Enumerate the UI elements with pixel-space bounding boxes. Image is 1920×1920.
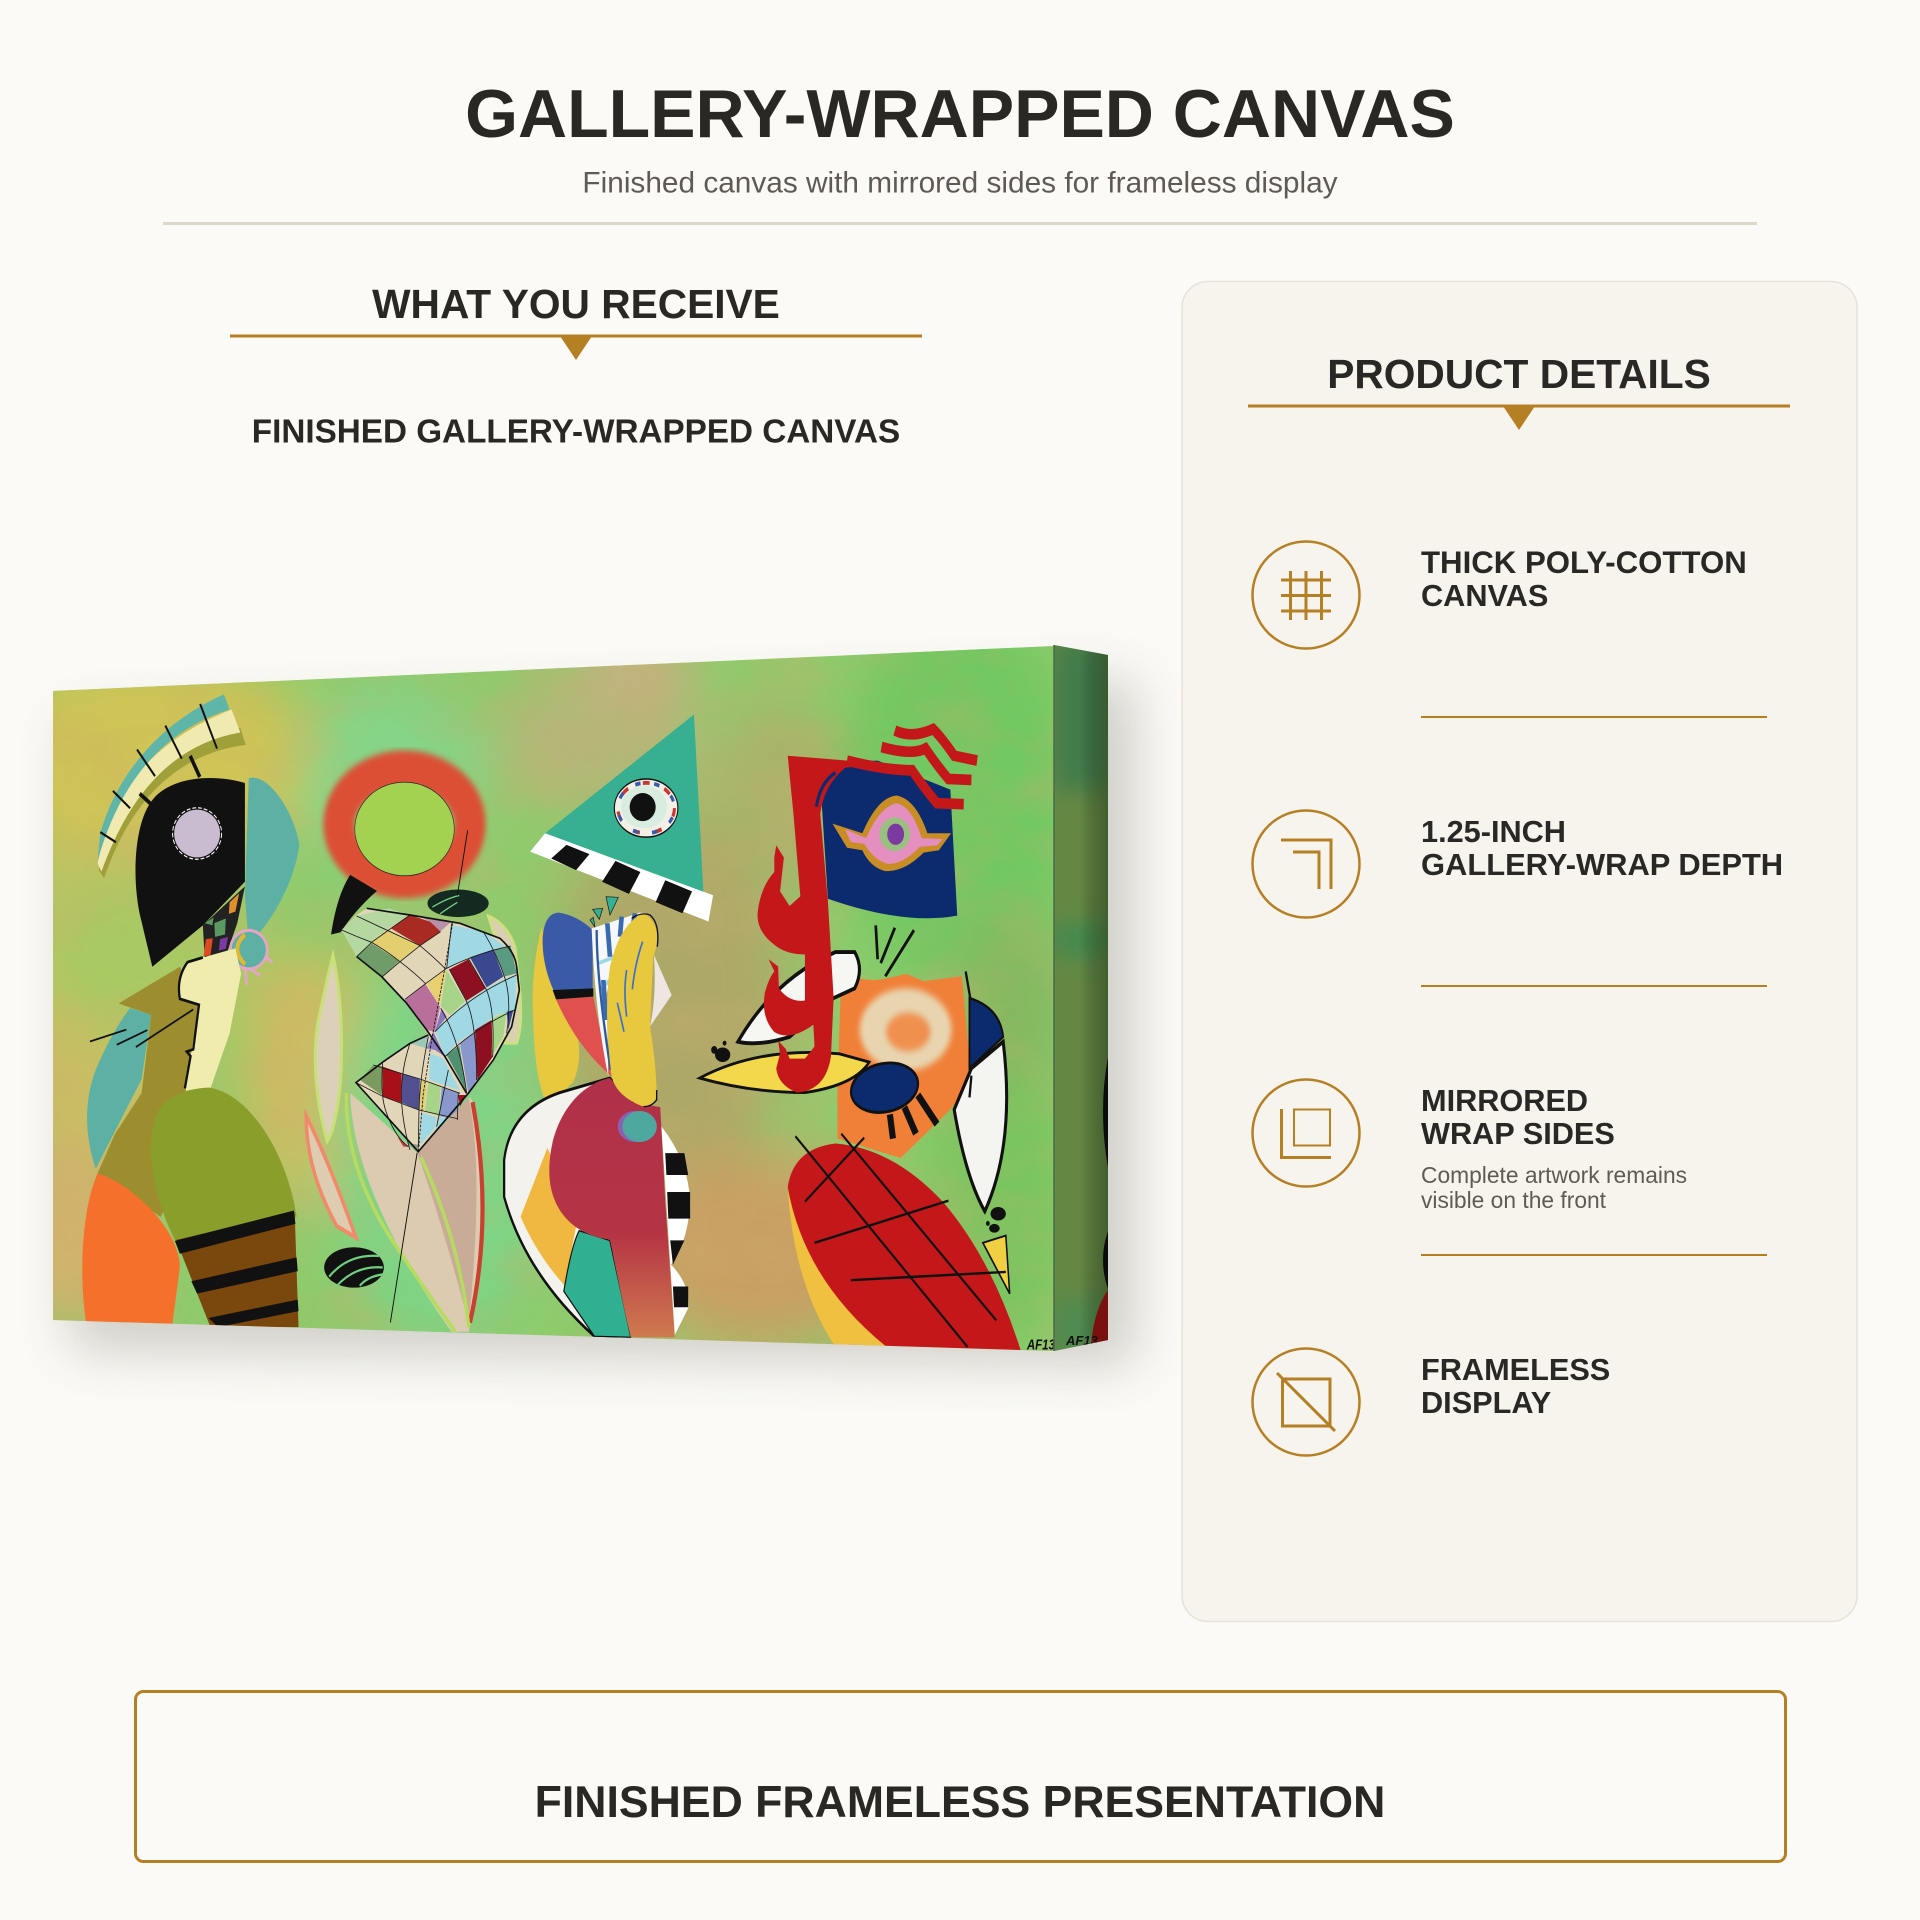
pale leaf — [315, 955, 342, 1141]
pale triangle — [650, 955, 672, 1027]
painting front — [53, 646, 1054, 1351]
green torso — [151, 1087, 297, 1242]
section heading: what you receive — [230, 281, 922, 360]
text: MIRRORED — [1421, 1083, 1588, 1118]
olive collar body — [98, 966, 198, 1217]
net form — [342, 908, 521, 1152]
red wedge — [556, 997, 612, 1077]
net outline — [356, 908, 519, 1152]
navy hatch — [816, 773, 845, 807]
teal wedge — [564, 1231, 631, 1337]
row: wrap depth — [1252, 810, 1783, 987]
figure 3: upper back forms — [533, 913, 647, 1103]
text: THICK POLY-COTTON — [1421, 545, 1747, 580]
crest — [98, 694, 246, 878]
icon: depth corner — [1252, 810, 1360, 918]
crimson form — [549, 1078, 675, 1337]
subtitle: Finished canvas with mirrored sides for frameless display — [582, 166, 1338, 200]
text: DISPLAY — [1421, 1385, 1551, 1420]
text: CANVAS — [1421, 578, 1548, 613]
face — [179, 948, 241, 1091]
white body — [504, 1078, 633, 1337]
navy oval — [849, 1058, 921, 1118]
teal triangle — [545, 715, 704, 894]
text: FRAMELESS — [1421, 1352, 1610, 1387]
head eye — [173, 808, 222, 859]
orange torso — [837, 971, 971, 1158]
mosaic neck — [203, 886, 245, 958]
row: frameless — [1252, 1348, 1610, 1456]
row: poly-cotton — [1252, 542, 1767, 718]
checked hat — [592, 913, 647, 1077]
red J form — [758, 756, 878, 1093]
side leaf — [488, 916, 521, 1043]
title: GALLERY-WRAPPED CANVAS — [465, 76, 1455, 152]
yellow orange wedge — [521, 1148, 578, 1285]
icon: canvas weave — [1252, 542, 1360, 648]
checker band — [530, 833, 713, 921]
navy arc — [969, 998, 1003, 1068]
text: GALLERY-WRAP DEPTH — [1421, 847, 1783, 882]
earring — [230, 930, 272, 985]
black beak — [331, 875, 377, 935]
text: 1.25-INCH — [1421, 814, 1566, 849]
small black strokes — [876, 925, 914, 976]
orange arm — [82, 1173, 180, 1325]
striped right — [661, 1127, 690, 1335]
signature: AF13 — [1026, 1336, 1056, 1353]
pastel spot — [618, 1111, 657, 1142]
yellow blade — [700, 1052, 869, 1093]
net cells — [342, 908, 517, 1152]
net thin grid — [342, 915, 517, 1150]
navy head — [820, 761, 957, 918]
beige body — [346, 1093, 483, 1332]
figure 4: red and navy face — [700, 729, 1056, 1353]
row: mirrored sides — [1252, 1080, 1767, 1256]
icon: mirrored square — [1252, 1080, 1360, 1186]
section heading: what you receive: WHAT YOU RECEIVE — [372, 281, 780, 327]
canvas side — [1054, 640, 1110, 1360]
whisker lines — [90, 1009, 193, 1047]
net base — [342, 908, 519, 1152]
teal chips — [590, 897, 618, 927]
bottom banner — [136, 1692, 1786, 1862]
note: visible on the front — [1421, 1187, 1607, 1213]
figure 3: triangle-hat figure — [504, 715, 713, 1337]
bottom banner: FINISHED FRAMELESS PRESENTATION — [535, 1778, 1385, 1827]
subheading: finished canvas: FINISHED GALLERY-WRAPPED CANVAS — [252, 414, 900, 450]
teal ear — [245, 778, 299, 944]
canvas mockup — [0, 600, 1135, 1365]
striped oval — [324, 1247, 384, 1288]
canvas side: AF13 — [1065, 1333, 1099, 1348]
figure 2: ring and leaves — [306, 769, 489, 1332]
white beak — [738, 952, 859, 1043]
painted background — [53, 646, 1054, 1351]
net dashed line — [418, 923, 453, 1152]
panel: product details — [1182, 282, 1857, 1622]
red leaf — [788, 1134, 1021, 1352]
blue shoulder — [543, 913, 593, 990]
icon: crossed frame — [1252, 1348, 1360, 1456]
yellow left form — [533, 927, 579, 1103]
peach leaf — [306, 1116, 356, 1238]
red waves — [847, 729, 977, 804]
teal left back — [87, 1008, 151, 1169]
header — [163, 76, 1757, 225]
black dots — [711, 1041, 1006, 1233]
striped sleeve — [175, 1211, 299, 1327]
text: WRAP SIDES — [1421, 1116, 1615, 1151]
head eye — [832, 795, 951, 871]
torso stripes — [890, 1095, 937, 1139]
red ring — [339, 769, 470, 879]
canvas shadow — [70, 680, 1135, 1365]
figure 1: crested profile — [82, 694, 299, 1327]
head — [135, 778, 245, 967]
white drop — [954, 1042, 1007, 1211]
panel heading — [1248, 351, 1790, 430]
panel heading: PRODUCT DETAILS — [1327, 351, 1711, 397]
yellow accent — [983, 1236, 1010, 1294]
dark oval — [427, 890, 489, 917]
canvas fold line — [1053, 645, 1055, 1351]
triangle eye — [614, 779, 678, 837]
figure 3: yellow ear — [590, 897, 672, 1107]
note: Complete artwork remains — [1421, 1162, 1687, 1188]
